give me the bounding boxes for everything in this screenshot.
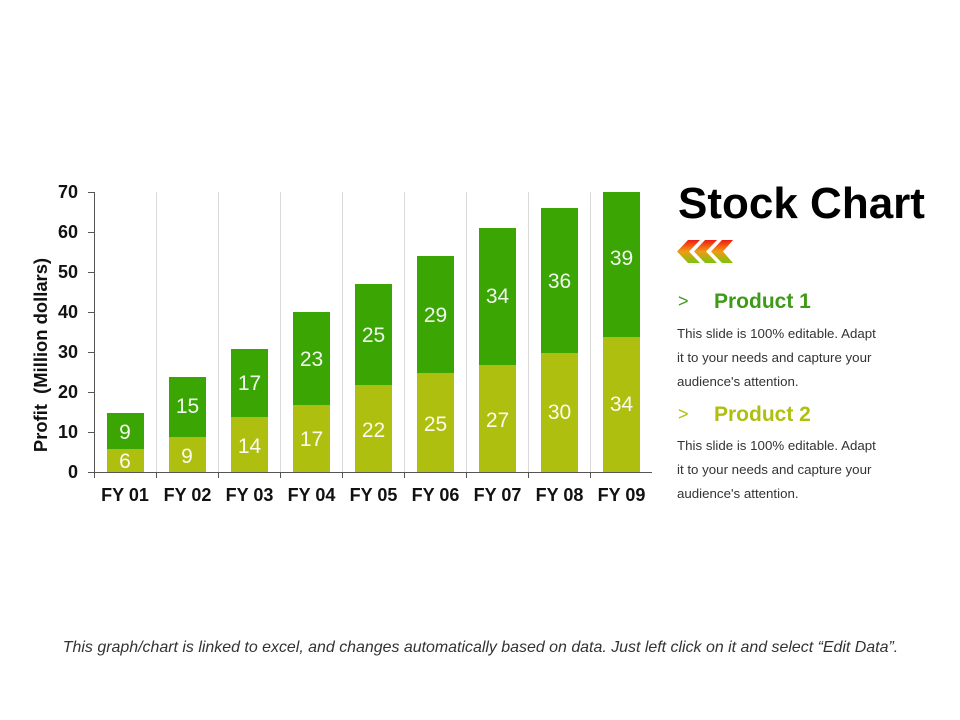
data labels: 17	[300, 428, 323, 451]
data labels: 9	[181, 445, 193, 468]
footnote: This graph/chart is linked to excel, and changes automatically based on data. Just left click on it and select “Edit Data”.	[63, 639, 898, 656]
x axis labels: FY 04	[288, 485, 335, 505]
data labels: 34	[486, 285, 509, 308]
bars: product 2	[107, 337, 640, 472]
data labels: 29	[424, 304, 447, 327]
y axis labels: 20	[58, 382, 78, 402]
title: Stock Chart	[678, 179, 925, 228]
y axis labels: 70	[58, 182, 78, 202]
x axis labels: FY 07	[474, 485, 521, 505]
y axis labels: 0	[68, 462, 78, 482]
product 1 text: it to your needs and capture your	[677, 350, 872, 365]
product 2 text: it to your needs and capture your	[677, 462, 872, 477]
product 2 text: audience's attention.	[677, 486, 799, 501]
product 1 text: audience's attention.	[677, 374, 799, 389]
data labels: 14	[238, 435, 261, 458]
icon: chevrons	[677, 240, 733, 263]
product 2 text	[677, 438, 876, 501]
y axis labels: 50	[58, 262, 78, 282]
y axis labels: 60	[58, 222, 78, 242]
x axis labels: FY 06	[412, 485, 459, 505]
data labels: 23	[300, 348, 323, 371]
data labels: 6	[119, 450, 131, 473]
x axis labels: FY 01	[101, 485, 149, 505]
data labels: 36	[548, 270, 571, 293]
y axis labels: 40	[58, 302, 78, 322]
data labels: 30	[548, 401, 571, 424]
data labels: 39	[610, 247, 633, 270]
data labels: 25	[362, 324, 385, 347]
y axis labels	[58, 182, 78, 482]
x axis labels: FY 09	[598, 485, 645, 505]
x axis labels: FY 02	[164, 485, 211, 505]
data labels: 27	[486, 409, 509, 432]
y axis labels: 30	[58, 342, 78, 362]
product 1 text	[677, 326, 876, 389]
data labels: 9	[119, 421, 131, 444]
x axis labels	[101, 485, 645, 505]
product 2 block	[677, 403, 876, 501]
x axis labels: FY 08	[536, 485, 583, 505]
product 1 block	[677, 290, 876, 389]
y axis title: Profit (Million dollars)	[30, 258, 51, 452]
product 2 text: This slide is 100% editable. Adapt	[677, 438, 876, 453]
product 1 text: This slide is 100% editable. Adapt	[677, 326, 876, 341]
data labels	[119, 247, 633, 473]
x axis labels: FY 05	[350, 485, 397, 505]
stacked bar chart	[30, 182, 652, 505]
product 2 heading: >	[678, 404, 689, 424]
axis lines	[88, 192, 652, 478]
product 1 heading: Product 1	[714, 290, 811, 313]
data labels: 25	[424, 413, 447, 436]
data labels: 15	[176, 395, 199, 418]
y axis labels: 10	[58, 422, 78, 442]
data labels: 34	[610, 393, 633, 416]
data labels: 22	[362, 419, 385, 442]
data labels: 17	[238, 372, 261, 395]
product 2 heading: Product 2	[714, 403, 811, 426]
x axis labels: FY 03	[226, 485, 273, 505]
product 1 heading: >	[678, 291, 689, 311]
bars: product 1	[107, 192, 640, 449]
